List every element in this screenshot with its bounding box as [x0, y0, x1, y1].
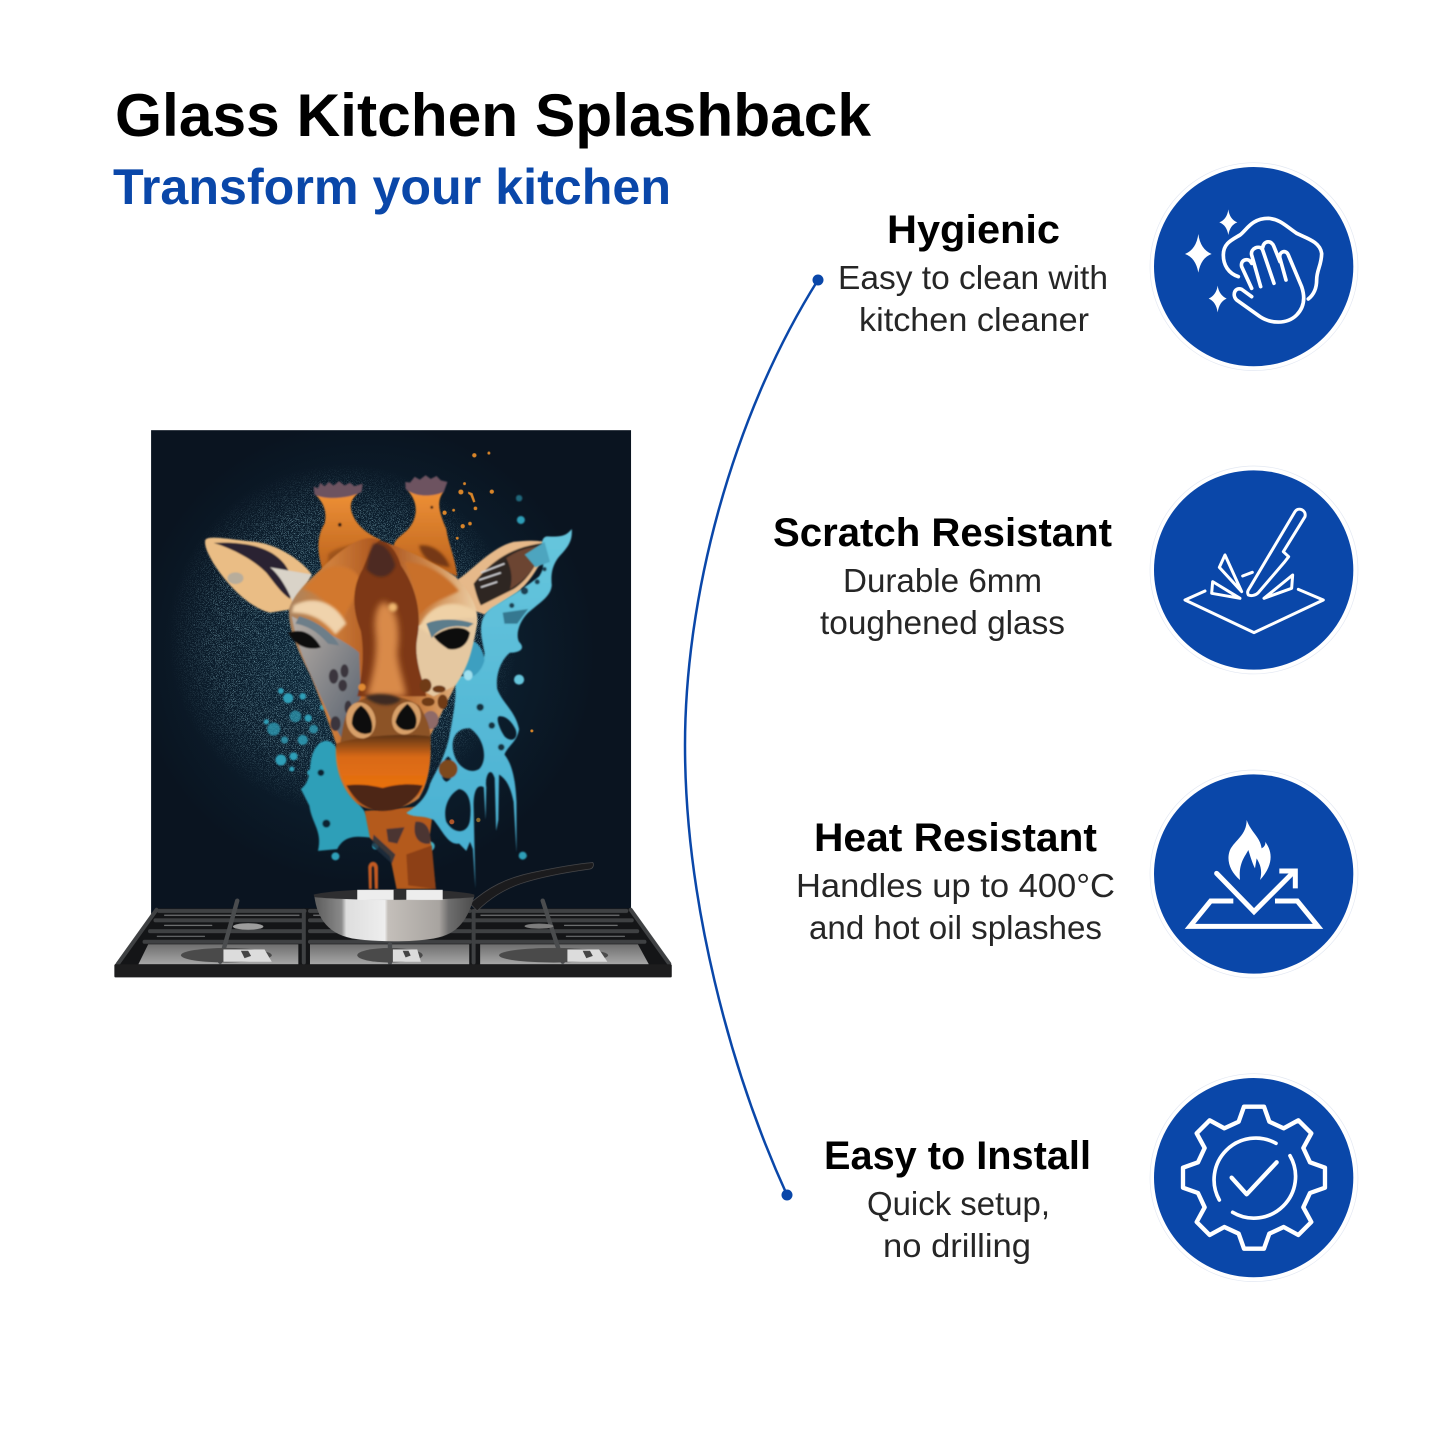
description: hygienic: Easy to clean with: [838, 259, 1108, 296]
description: easy to install: no drilling: [883, 1227, 1031, 1264]
icon: scratch resistant, knife on surface: [1150, 466, 1358, 674]
description: scratch resistant: [820, 562, 1065, 641]
description: scratch resistant: toughened glass: [820, 604, 1065, 641]
pan rim and reflections: [314, 889, 474, 900]
tufts: [314, 481, 363, 498]
description: hygienic: kitchen cleaner: [859, 301, 1089, 338]
feature text: heat resistant: [796, 816, 1115, 946]
giraffe left ear: [205, 538, 312, 613]
subtitle: Transform your kitchen: [113, 159, 671, 215]
mouth: [346, 784, 423, 811]
heading: easy to install: Easy to Install: [824, 1134, 1091, 1178]
pan body: [314, 896, 474, 941]
description: hygienic: [838, 259, 1108, 338]
steel surface: [138, 944, 649, 964]
right light-blue paint splash: [406, 529, 572, 889]
snout: [339, 695, 431, 749]
splashback panel: [151, 430, 631, 914]
description: easy to install: Quick setup,: [867, 1185, 1050, 1222]
frying pan: [314, 863, 593, 941]
icon: hygienic, hand wiping with cloth: [1150, 163, 1358, 371]
giraffe ossicones: [314, 475, 457, 576]
hob body: [114, 908, 672, 965]
feature text: scratch resistant: [773, 511, 1112, 641]
spots on cheeks: [329, 664, 352, 731]
description: heat resistant: [796, 867, 1115, 946]
burners: [181, 923, 608, 962]
description: easy to install: [867, 1185, 1050, 1264]
description: heat resistant: and hot oil splashes: [809, 909, 1102, 946]
feature text: easy to install: [824, 1134, 1091, 1264]
left blue splatter: [264, 495, 527, 860]
giraffe right ear: [457, 541, 548, 615]
connector curve: [685, 274, 824, 1200]
description: scratch resistant: Durable 6mm: [843, 562, 1042, 599]
grate bars: [118, 901, 669, 964]
icon: heat resistant, flame and arrow: [1150, 770, 1358, 978]
left cheek: [292, 616, 361, 740]
heading: scratch resistant: Scratch Resistant: [773, 511, 1112, 555]
orange paint droplets: [442, 452, 533, 824]
title: Glass Kitchen Splashback: [115, 82, 872, 149]
right cheek: [412, 615, 475, 696]
heading: heat resistant: Heat Resistant: [814, 816, 1097, 860]
gas hob: [114, 901, 672, 977]
icon: easy to install, gear with checkmark: [1150, 1074, 1358, 1282]
heading: hygienic: Hygienic: [887, 208, 1060, 252]
forehead shading and central ridge: [292, 600, 346, 635]
front edge: [114, 964, 672, 977]
forehead patches: [303, 566, 361, 622]
description: heat resistant: Handles up to 400°C: [796, 867, 1115, 904]
giraffe head: [288, 538, 477, 811]
neck: [365, 805, 436, 889]
product image: glass splashback above gas hob: [114, 430, 672, 977]
feature text: hygienic: [838, 208, 1108, 338]
nostrils: [343, 700, 379, 741]
muzzle: [336, 735, 430, 808]
eyes: [288, 631, 321, 649]
pan handle: [470, 863, 593, 911]
